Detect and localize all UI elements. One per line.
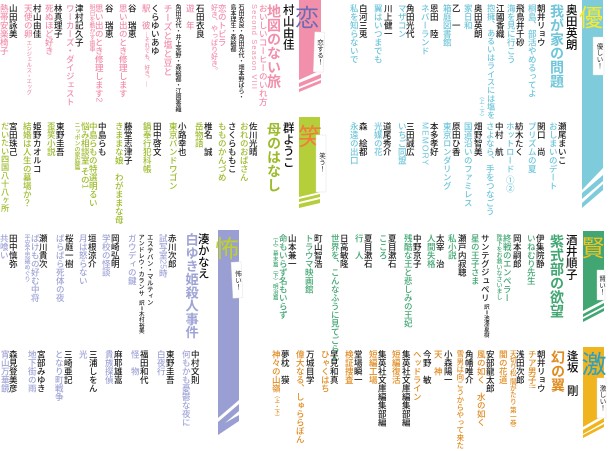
featured subtitle: おいしいコーヒーのいれ方 (258, 4, 268, 106)
title: 神々の山嶺 （上・下） (271, 350, 281, 420)
editor: 集英社文庫編集部編 (401, 350, 411, 426)
author: エステバン・マルティン (145, 234, 152, 306)
banner: 怖: 怖い！ (234, 269, 242, 290)
title: 天使の卵 エンジェルス・エッグ (23, 4, 33, 95)
author: 川上健一 (383, 4, 393, 38)
title: MEMORY (420, 122, 430, 166)
panel: 笑 laugh section (0, 117, 326, 224)
subtitle: 陛下をお救いなさいまし (495, 234, 501, 300)
author: 瀬川貴次 (38, 234, 48, 268)
co-author: アンドレウ・カランサ (137, 234, 144, 296)
title: 遊 年 (185, 4, 195, 30)
title: 家日和 (463, 4, 473, 30)
panel: 優 kind section (349, 0, 604, 216)
author: 桜庭一樹 (64, 234, 74, 268)
featured author: 村山由佳 (282, 4, 294, 50)
title: 風の如く 水の如く (476, 350, 486, 426)
title: チーズと塩と豆と (162, 4, 172, 76)
title: 何もかも憂鬱な夜に (181, 350, 191, 426)
author: 本多孝好 (429, 122, 439, 156)
title: もものかんづめ (217, 122, 227, 182)
author: 中村文則 (190, 350, 200, 384)
title: ネバーランド (420, 4, 430, 55)
title: 偉大なる、しゅららぼん (295, 350, 305, 444)
title: 抱擁、あるいはライスには塩を (486, 4, 495, 119)
author: 瀬戸内寂聴 (457, 234, 467, 276)
banner: 優: 優しい！ (595, 42, 603, 69)
author: 夏目漱石 (387, 234, 397, 268)
title: 怪 物 (130, 350, 140, 376)
featured title: 地図のない旅 (266, 4, 282, 88)
featured author: 奥田英朗 (565, 4, 577, 50)
author: 椎名 誠 (203, 122, 213, 156)
banner: 恋 (295, 0, 325, 92)
title: 短編復活 (391, 350, 401, 384)
panel: 賢 wise section (272, 231, 606, 362)
authors line 1: 石田衣良・角田光代・畑本野ばら・ (237, 4, 243, 100)
title: いちご同盟 (397, 122, 407, 164)
author: 角田光代 (405, 4, 415, 38)
banner: 激 (581, 347, 607, 438)
editor: 集英社文庫編集部編 (377, 350, 387, 426)
title: ひゃくはち (320, 350, 330, 392)
author: 森見登美彦 (8, 350, 18, 392)
author: 日高敏隆 (339, 234, 349, 268)
title: ヘッドライン (412, 350, 422, 401)
title: 駅 彼 ―それでも、好き。― (141, 4, 151, 87)
panel: 怖 scary section (0, 230, 244, 435)
title: 私小説 (447, 234, 457, 260)
featured season: Second Season VIII (250, 4, 259, 90)
title: 国道沿いのファミレス (463, 122, 473, 207)
author: 瀬尾まいこ (557, 122, 567, 164)
author: 道尾秀介 (382, 122, 392, 156)
subtitle: ニッポンの家庭篇 (73, 122, 79, 170)
author: 赤川次郎 (167, 234, 177, 268)
title: 天 神 (433, 350, 443, 376)
title: 光媒の花 (373, 122, 383, 156)
featured author: 逢坂 剛 (566, 350, 578, 396)
author: サンテグジュペリ (480, 234, 490, 302)
subtitle: 天切り松 闇がたり 第一巻 (508, 350, 515, 426)
author: さくらももこ (227, 122, 237, 173)
title: 思い出のとき修理します2 (94, 4, 104, 102)
title: ガウディの鍵 (127, 234, 137, 285)
author: 角幡唯介 (464, 350, 474, 384)
author: 乙 一 (451, 4, 461, 30)
title: おれのおばさん (239, 122, 249, 182)
banner: 賢: 賢い！ (598, 275, 606, 295)
author: 麻耶雄嵩 (113, 350, 123, 384)
title: 翼はいつまでも (373, 4, 383, 64)
title: 貴族探偵 (104, 350, 114, 384)
author: 中島らも (97, 122, 107, 156)
author: 関口 尚 (536, 122, 546, 156)
translator: 訳＝木村裕美 (138, 300, 144, 334)
title: 岳物語 (194, 122, 204, 148)
title: 海を見に行こう (506, 4, 516, 64)
title: ばらばら死体の夜 (55, 234, 65, 302)
author: 東野圭吾 (55, 122, 65, 156)
title: となり町戦争 (54, 350, 64, 401)
banner: 激: 激 (581, 351, 607, 379)
title: プリズムの夏 (527, 122, 537, 173)
author: 浅田次郎 (515, 350, 525, 384)
banner: 笑: 笑 (298, 124, 322, 151)
title: 死ぬほど好き (44, 4, 54, 55)
title: 世界を、こんなふうに見てごらん (330, 234, 340, 362)
title: おしまいのデート (548, 122, 558, 190)
title: 光 (78, 350, 88, 358)
author: 朝井リョウ (536, 350, 546, 392)
featured title: 紫式部の欲望 (549, 234, 565, 318)
title: チア男子!! (527, 350, 537, 389)
author: 万城目学 (305, 350, 315, 384)
author: 谷 瑞恵 (127, 4, 137, 38)
author: くらゆいあゆ (150, 4, 160, 55)
title: 行 人 (354, 234, 364, 260)
author: 小森陽一 (443, 350, 453, 384)
author: 田中啓文 (152, 122, 162, 156)
title: 桐島、部活やめるってよ (527, 4, 537, 98)
title: こころ (378, 234, 388, 260)
author: 姫野カオルコ (32, 122, 42, 173)
title: 恋のトビラ: 恋のトビラ (217, 4, 227, 46)
author: 朝井リョウ (536, 4, 546, 46)
author: 中野京子 (412, 234, 422, 268)
title: 結婚は人生の墓場か？ (22, 122, 32, 207)
title: 永遠の出口 (349, 122, 359, 164)
author: 佐川光晴 (248, 122, 258, 156)
title: 試写室25時 (158, 234, 168, 277)
featured title: 幻の翼 (550, 350, 566, 392)
banner: 笑 (298, 117, 326, 208)
title: 中島らもの特選明るい (88, 122, 98, 207)
author: 三浦しをん (88, 350, 98, 392)
author: 今野 敏 (422, 350, 432, 384)
author: 伊集院静 (535, 234, 545, 268)
title: 白夜行 (156, 350, 166, 376)
author: 田中慎弥 (8, 234, 18, 268)
featured title: 我が家の問題 (549, 4, 565, 88)
author: 東野圭吾 (165, 350, 175, 384)
author: 早見和真 (329, 350, 339, 384)
volume note: （上・下） (478, 94, 484, 119)
title: きままな娘 わがままな母 (114, 122, 124, 224)
author: 村山由佳 (32, 4, 42, 38)
author: 垣根涼介 (87, 234, 97, 268)
title: 短編工場 (368, 350, 378, 384)
authors: 角田光代・井上荒野・森絵都・江國香織 (174, 4, 180, 112)
author: 谷 瑞恵 (104, 4, 114, 38)
author: 藤堂志津子 (123, 122, 133, 164)
author: 三崎亜記 (63, 350, 73, 384)
author: 岡崎弘明 (110, 234, 120, 268)
author: 福田和代 (139, 350, 149, 384)
author: 堂場瞬一 (353, 350, 363, 384)
title: 東京バンドワゴン (168, 122, 178, 190)
title: だいたい四国八十八ヶ所 (0, 122, 9, 212)
featured author: 酒井順子 (565, 234, 577, 280)
author: 夢枕 獏 (280, 350, 290, 384)
title: トラウマ映画館 (304, 234, 314, 294)
featured author: 群ようこ (282, 122, 294, 168)
banner: 賢: 賢 (582, 235, 604, 261)
title: 残酷な王と悲しみの王妃 (403, 234, 413, 328)
author: 中村 航 (494, 122, 504, 156)
author: 宮部みゆき (36, 350, 46, 392)
title: ワーカーズ・ダイジェスト (65, 4, 75, 106)
author: 畑野智美 (473, 122, 483, 156)
author: 小路幸也 (177, 122, 187, 156)
title: 私を知らないで (349, 4, 359, 64)
banner: 怖: 怖 (215, 236, 239, 263)
author: 三田誠広 (405, 122, 415, 156)
author: 恩田 陸 (429, 4, 439, 38)
featured title: 白ゆき姫殺人事件 (184, 233, 199, 339)
featured title: 母のはなし (266, 122, 282, 192)
author: 飛鳥井千砂 (515, 4, 525, 46)
title: 学校の怪談 (101, 234, 111, 276)
panel: 恋 love section (0, 0, 325, 112)
title: 東京ロンダリング (442, 122, 452, 190)
author: 江國香織 (495, 4, 505, 38)
title: さよなら、手をつなごう (485, 122, 495, 216)
banner: 優: 優 (579, 5, 603, 32)
authors line 2: 島本理生・森絵都 (229, 4, 235, 52)
title: 月は怒らない (78, 234, 88, 285)
panel: 激 intense section (271, 347, 607, 449)
title: 地下街の雨 (27, 350, 37, 392)
author: 夏目漱石 (363, 234, 373, 268)
title: 検証捜査 (344, 350, 354, 384)
author: 石田衣良 (195, 4, 205, 38)
title: マザコン (397, 4, 407, 38)
author: 太宰 治 (435, 234, 445, 268)
author: 山本兼一 (287, 234, 297, 268)
author: 津村記久子 (74, 4, 84, 46)
banner: 優 (579, 0, 604, 208)
author: 森 絵都 (358, 122, 368, 156)
author: 岡本嗣郎 (512, 234, 522, 268)
title: 宵山万華鏡 (0, 350, 10, 392)
title: いねむり先生 (526, 234, 536, 285)
title: 思い出のとき修理します (118, 4, 128, 98)
featured author: 湊かなえ (197, 233, 209, 279)
translator: 訳＝池澤夏樹 (483, 304, 489, 338)
volumes: （上）幕末篇（下）明治篇 (272, 234, 278, 300)
banner: 賢 (582, 231, 606, 322)
title line 2: 悩み相談室 その1 (80, 122, 90, 189)
author: 林真理子 (53, 4, 63, 38)
banner: 恋: 恋する！ (316, 39, 324, 65)
title: 人間失格 (426, 234, 436, 268)
title: 終戦のエンペラー (502, 234, 512, 302)
author: 原田ひ香 (451, 122, 461, 156)
author: 山田詠美 (8, 4, 18, 38)
title: 鍋奉行犯科帳 (142, 122, 152, 173)
title: 星の王子さま (470, 234, 480, 285)
title: 命もいらず名もいらず (278, 234, 288, 319)
author: 安部龍太郎 (485, 350, 495, 392)
banner: 激: 激しい！ (598, 384, 606, 411)
author: 宮田珠己 (8, 122, 18, 156)
banner: 恋: 恋 (295, 5, 319, 32)
title: ホットロード ①② (505, 122, 515, 192)
subtitle: 好き、やっぱり好き。 (210, 4, 218, 74)
author: 町山智浩 (313, 234, 323, 268)
banner: 怖 (215, 230, 244, 435)
title: ばけもの好む中将 (30, 234, 40, 302)
subtitle: 明日を動かす歯車 (88, 4, 94, 52)
banner: 笑: 笑う！ (318, 151, 326, 172)
subtitle: 平安不思議めぐり (23, 234, 29, 282)
title: 闇の花道 (498, 350, 508, 384)
author: 紡木たく (514, 122, 524, 156)
title: 箱庭図書館 (442, 4, 452, 46)
author: 奥田英朗 (473, 4, 483, 38)
title: 歪笑小説 (46, 122, 56, 156)
author: 白河三兎 (358, 4, 368, 38)
title: 雪男は向こうからやって来た (456, 350, 465, 449)
